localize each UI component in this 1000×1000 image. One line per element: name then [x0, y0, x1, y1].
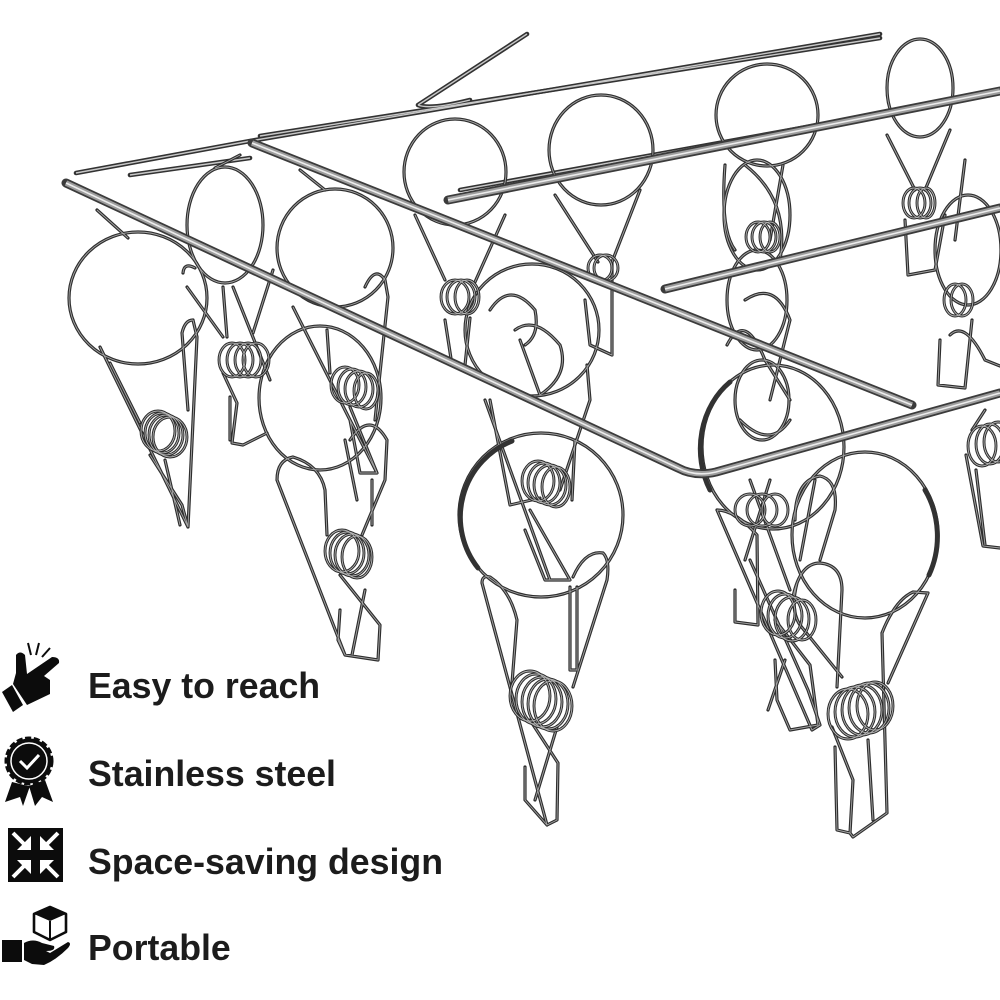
chain clips: [724, 160, 790, 270]
spring clips and rings wires: [69, 39, 1000, 837]
thick ring highlights: [460, 382, 937, 575]
coil back H: [903, 188, 935, 218]
label: Stainless steel: [88, 754, 336, 794]
coil D: [325, 530, 372, 578]
coil back F: [588, 255, 618, 281]
big centre clip: [482, 553, 608, 825]
feature: space-saving design: [8, 828, 443, 882]
coil back G: [746, 222, 780, 252]
back row rings: [404, 119, 506, 225]
coil mid right back: [735, 494, 788, 526]
label: Easy to reach: [88, 666, 320, 706]
feature: easy to reach: [2, 643, 320, 712]
centre rings: [465, 264, 599, 396]
mid right clip: [717, 480, 820, 730]
feature: stainless steel: [5, 738, 336, 806]
coil mid right: [761, 591, 816, 641]
front right clip: [793, 476, 928, 837]
clip D: [277, 425, 387, 660]
icon: hand holding box: [2, 907, 70, 965]
label: Space-saving design: [88, 842, 443, 882]
coil B: [219, 343, 269, 377]
clip C: [293, 274, 388, 473]
back row clips: [415, 215, 505, 365]
frame rods: [66, 91, 1000, 474]
coil back E: [441, 280, 479, 314]
coil C: [331, 367, 378, 409]
icon: compress arrows: [8, 828, 63, 882]
feature: portable: [2, 907, 231, 968]
clip A: [100, 320, 197, 527]
left rings: [69, 232, 207, 364]
coil front right: [828, 682, 893, 739]
icon: snapping hand: [2, 643, 59, 712]
drying rack product photo: [66, 34, 1000, 837]
coil big centre: [510, 671, 572, 731]
rear frame rods: [76, 34, 1000, 285]
coil springs: [141, 188, 1000, 739]
clip links to rod: [97, 155, 325, 238]
coil right edge upper: [944, 284, 973, 316]
right rings: [702, 365, 844, 529]
centre upper clip: [485, 295, 590, 580]
coil right edge lower: [968, 422, 1000, 466]
icon: quality badge: [5, 738, 53, 806]
clip B: [183, 266, 273, 445]
coil A: [141, 411, 187, 457]
clip right edge lower wires: [966, 410, 1000, 548]
coil centre upper: [522, 461, 570, 507]
label: Portable: [88, 928, 231, 968]
